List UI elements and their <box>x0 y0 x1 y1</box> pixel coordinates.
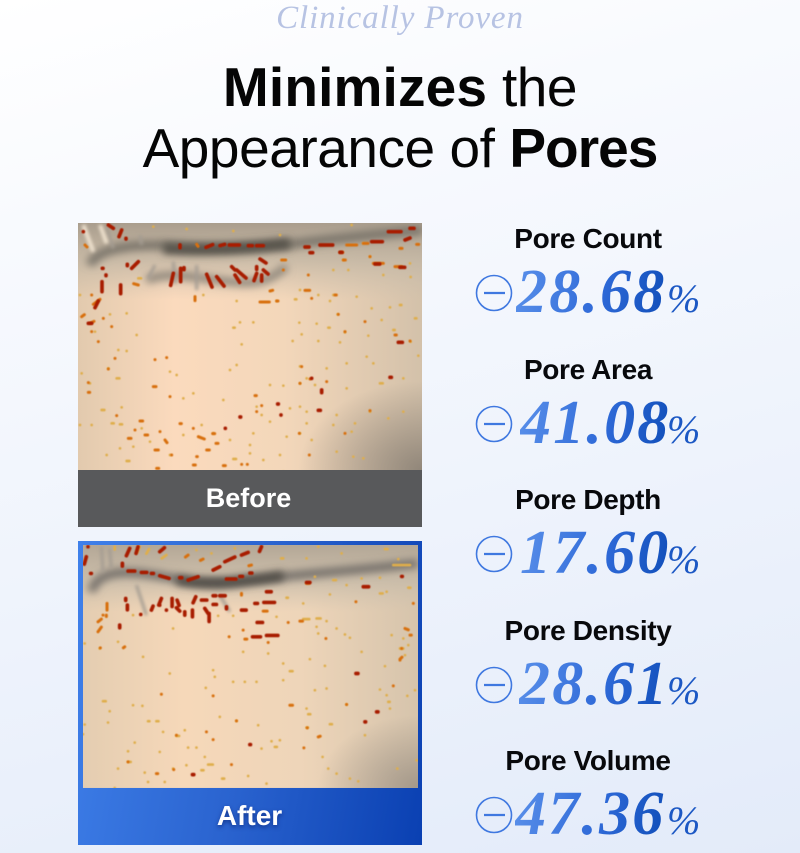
stat: pore area <box>476 354 700 457</box>
stat: pore depth <box>476 484 700 587</box>
pore markers: orange <box>98 555 413 774</box>
after caption bar: After <box>217 800 282 831</box>
label: Pore Count <box>514 223 662 254</box>
percent sign: % <box>667 537 700 582</box>
panel: before photo <box>78 223 422 527</box>
stat: pore density <box>476 615 700 718</box>
icon: minus circle <box>476 406 512 442</box>
pore markers: yellow <box>80 225 418 472</box>
value: 47.36 <box>515 780 666 848</box>
skin map image: before <box>78 223 422 470</box>
stat: pore count <box>476 223 700 326</box>
percent sign: % <box>667 668 700 713</box>
label: Pore Area <box>524 354 652 385</box>
icon: minus circle <box>476 666 512 704</box>
pore markers: dark red <box>84 547 402 775</box>
value: 28.68 <box>516 258 666 326</box>
value: 28.61 <box>519 650 670 718</box>
title: Minimizes the <box>223 56 577 118</box>
pore markers: orange <box>82 243 419 468</box>
panel: after photo <box>78 541 422 845</box>
title <box>142 56 657 179</box>
before caption bar <box>78 470 422 527</box>
value: 41.08 <box>520 389 670 457</box>
value: 17.60 <box>520 519 670 587</box>
title: Appearance of Pores <box>143 117 657 179</box>
label: Pore Volume <box>505 745 671 776</box>
skin map image: after <box>83 545 418 788</box>
percent sign: % <box>667 798 700 843</box>
label: Pore Density <box>504 615 671 646</box>
percent sign: % <box>667 407 700 452</box>
stat: pore volume <box>476 745 700 848</box>
pore markers: dark red <box>83 225 414 428</box>
icon: minus circle <box>476 536 512 572</box>
label: Pore Depth <box>515 484 661 515</box>
pore markers: yellow <box>83 547 417 788</box>
icon: minus circle <box>476 274 512 312</box>
percent sign: % <box>667 276 700 321</box>
icon: minus circle <box>476 796 512 834</box>
before caption bar: Before <box>206 483 291 513</box>
eyebrow: Clinically Proven: Clinically Proven <box>276 0 524 36</box>
